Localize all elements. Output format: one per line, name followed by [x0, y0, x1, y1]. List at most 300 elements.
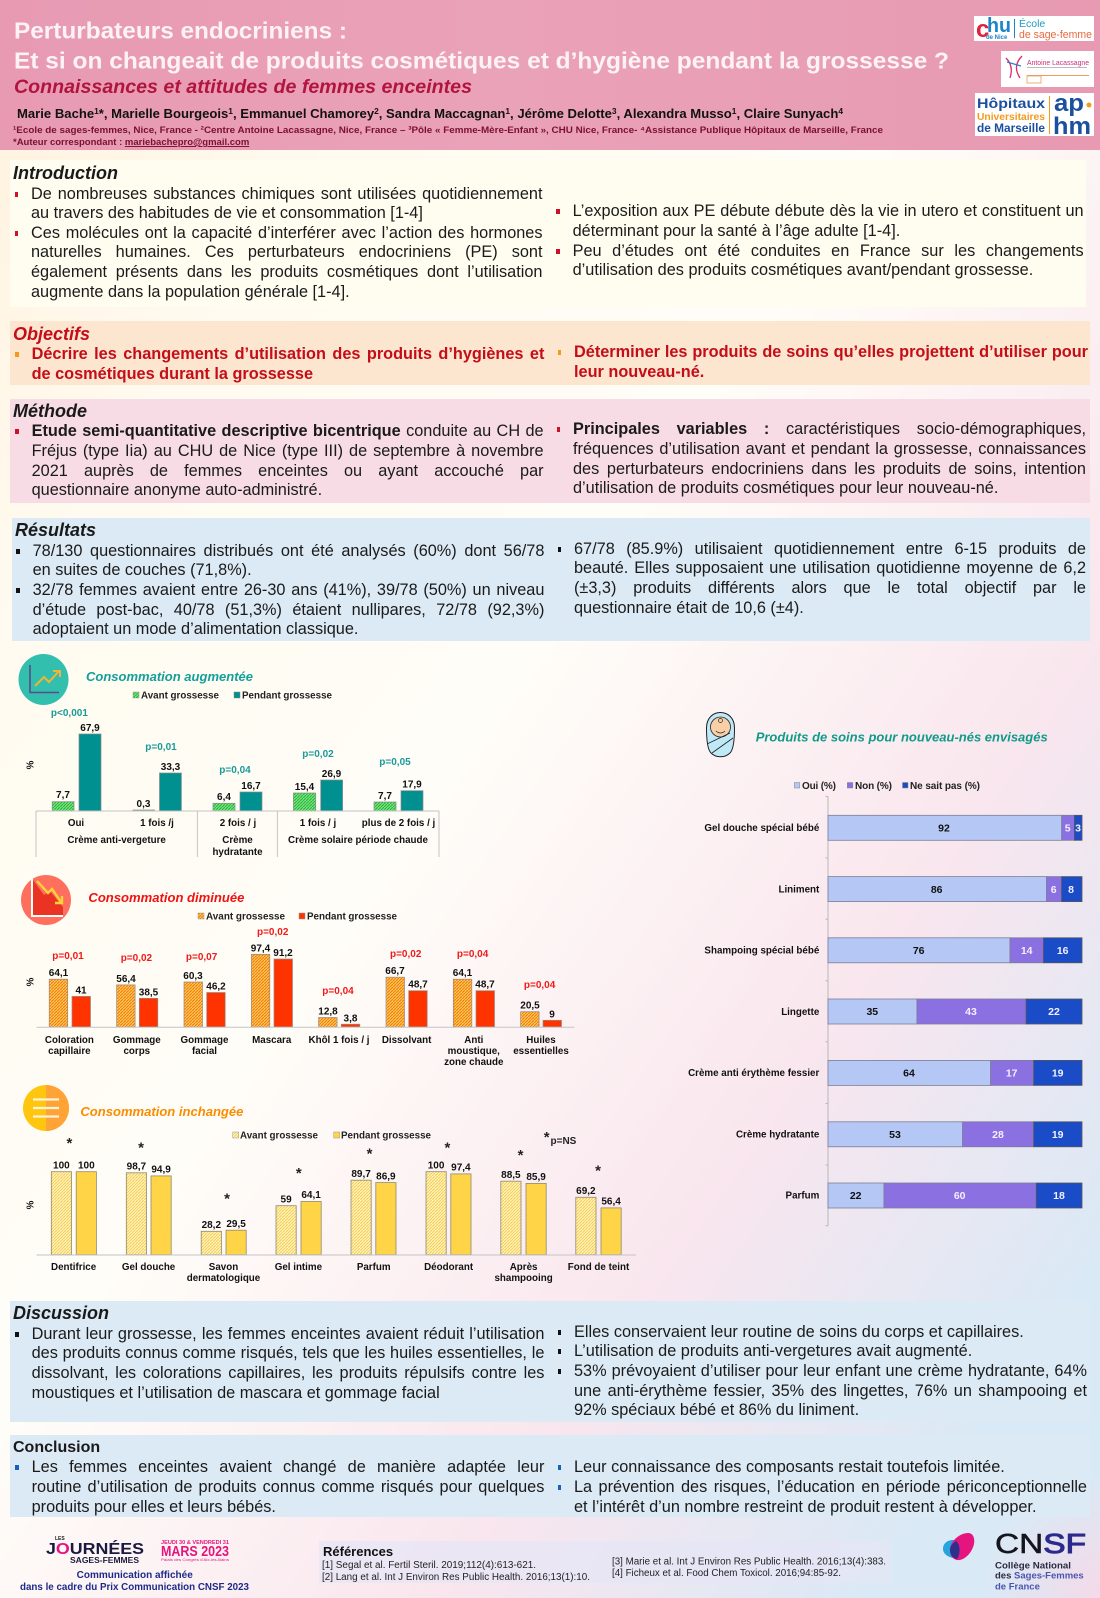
row: gel douche — [704, 815, 1082, 840]
heading: objectifs: Objectifs — [13, 324, 90, 344]
icon: stable lines — [23, 1085, 69, 1131]
logo: CNSF — [943, 1528, 1086, 1592]
value labels: 100 — [78, 1160, 95, 1172]
category labels — [67, 818, 436, 858]
value labels: 26,9 — [322, 769, 342, 780]
authors: , Claire Sunyach — [736, 107, 838, 121]
value labels: 0,3 — [137, 799, 151, 810]
significance stars — [66, 1135, 601, 1207]
row: gel douche: Gel douche spécial bébé — [704, 823, 820, 834]
logo: Journées Sages-Femmes — [46, 1536, 229, 1565]
chart: consommation augmentée — [18, 654, 439, 858]
communication note — [20, 1570, 249, 1593]
category labels: hydratante — [212, 847, 263, 858]
text block: méthode left: 2021 auprès de femmes enceintes ou ayant accouché par — [32, 462, 544, 480]
axis — [36, 811, 439, 857]
authors: 1 — [732, 107, 737, 116]
logo: Journées Sages-Femmes: MARS 2023 — [161, 1543, 229, 1560]
chart: consommation diminuée — [21, 875, 574, 1068]
value labels: 85,9 — [526, 1172, 546, 1183]
text block: discussion right: 92% spéciaux bébé et 86% du liniment. — [574, 1401, 859, 1419]
text block: discussion left: des produits connus comme risqués, tels que les huiles essentielles, le — [32, 1344, 544, 1362]
category labels: Déodorant — [424, 1262, 474, 1273]
legend: Pendant grossesse — [242, 690, 332, 702]
category labels: shampooing — [494, 1273, 553, 1284]
text block: discussion right — [558, 1323, 1087, 1419]
text block: résultats left: 32/78 femmes avaient entre 26-30 ans (41%), 39/78 (50%) un niveau — [33, 581, 544, 599]
text block: conclusion right: La prévention des risques, l’éducation en période périconceptionnelle — [574, 1478, 1087, 1496]
p values: p=0,01 — [52, 951, 84, 962]
category labels — [45, 1035, 569, 1068]
category labels: Gommage — [181, 1035, 229, 1046]
legend: Avant grossesse — [240, 1130, 318, 1142]
category labels: corps — [123, 1046, 151, 1057]
references heading: Références — [323, 1544, 393, 1559]
value labels: 56,4 — [601, 1196, 621, 1208]
chart title: Consommation inchangée — [80, 1104, 243, 1119]
category labels: 2 fois / j — [220, 818, 257, 829]
text block: introduction left: au travers des habitudes de vie et consommation [1-4] — [31, 204, 423, 222]
logo: Antoine Lacassagne — [1001, 51, 1094, 87]
communication note: dans le cadre du Prix Communication CNSF 2023 — [20, 1582, 249, 1593]
text block: résultats right — [558, 540, 1086, 617]
value labels: 98,7 — [127, 1162, 147, 1172]
text block: méthode left: Etude semi-quantitative descriptive bicentrique conduite au CH de — [32, 422, 544, 440]
legend: Avant grossesse — [141, 690, 219, 702]
row: parfum: 22 — [850, 1190, 862, 1202]
text block: objectifs left: Décrire les changements d’utilisation des produits d’hygiènes et — [32, 345, 544, 363]
authors: 1 — [228, 107, 234, 116]
authors: *, Marielle Bourgeois — [99, 107, 228, 121]
logo: CHU Nice: École — [1019, 17, 1045, 30]
logo: CHU Nice: c — [976, 16, 989, 43]
logo: Journées Sages-Femmes: JEUDI 30 & VENDREDI 31 — [161, 1540, 229, 1546]
chart title: Consommation diminuée — [88, 890, 244, 905]
row: crème hydratante: 19 — [1052, 1129, 1064, 1141]
row: lingette — [781, 999, 1082, 1024]
value labels: 28,2 — [202, 1220, 221, 1231]
value labels: 17,9 — [402, 780, 422, 790]
row: crème hydratante: Crème hydratante — [736, 1130, 820, 1140]
row: parfum: 18 — [1053, 1190, 1065, 1202]
value labels: 41 — [75, 986, 87, 996]
text block: objectifs right: Déterminer les produits de soins qu’elles projettent d’utiliser pour — [574, 343, 1088, 361]
value labels: 67,9 — [80, 723, 100, 734]
logo: Antoine Lacassagne: Antoine Lacassagne — [1027, 58, 1089, 67]
heading: discussion: Discussion — [13, 1303, 109, 1323]
p=NS note: * — [544, 1129, 550, 1146]
text block: discussion right: Elles conservaient leur routine de soins du corps et capillaires. — [574, 1323, 1024, 1341]
value labels: 100 — [53, 1160, 70, 1172]
significance stars: * — [66, 1135, 72, 1152]
text block: introduction left: naturelles humaines. Ces perturbateurs endocriniens (PE) sont — [31, 243, 542, 261]
text block: conclusion right: et l’intérêt d’un nombre restreint de produit restent à développer. — [574, 1498, 1036, 1516]
panel: méthode — [10, 399, 1090, 503]
panel: conclusion — [10, 1435, 1090, 1517]
text block: méthode right: d’utilisation de produits cosmétiques pour leur nouveau-né. — [573, 479, 998, 497]
significance stars: * — [138, 1140, 144, 1157]
logo: APHM: ap — [1054, 90, 1084, 117]
legend — [133, 690, 332, 702]
legend: Pendant grossesse — [307, 912, 397, 922]
category labels: Fond de teint — [568, 1262, 630, 1273]
p values: p=0,07 — [186, 952, 218, 963]
reference list — [322, 1556, 886, 1583]
value labels: 48,7 — [475, 980, 495, 990]
significance stars: * — [595, 1162, 601, 1179]
text block: méthode right — [557, 420, 1086, 497]
logo: APHM: Hôpitaux — [977, 95, 1045, 111]
communication note: Communication affichée — [77, 1570, 193, 1581]
row: lingette: 35 — [866, 1006, 878, 1018]
authors: 2 — [374, 107, 379, 116]
y axis unit: % — [26, 977, 36, 986]
authors: , Emmanuel Chamorey — [233, 107, 374, 121]
category labels: essentielles — [513, 1046, 569, 1057]
text block: résultats left: d’étude post-bac, 40/78 (51,3%) étaient nullipares, 72/78 (92,3%) — [33, 601, 544, 619]
logo: CNSF: des Sages-Femmes — [995, 1570, 1084, 1582]
row: crème anti érythème — [688, 1060, 1082, 1085]
title: Et si on changeait de produits cosmétiques et d’hygiène pendant la grossesse ? — [14, 48, 949, 74]
category labels: Huiles — [526, 1035, 556, 1046]
text block: introduction left: également présents dans les produits cosmétiques dont l’utilisation — [31, 263, 542, 281]
authors: Marie Bache — [17, 107, 91, 121]
value labels: 20,5 — [520, 1000, 540, 1012]
authors: 3 — [612, 107, 617, 116]
logo: Journées Sages-Femmes: Palais des Congrès d’Aix-les-Bains — [161, 1557, 229, 1562]
text block: conclusion left: Les femmes enceintes avaient changé de manière adaptée leur — [32, 1458, 544, 1476]
category labels: Coloration — [45, 1035, 94, 1046]
category labels: zone chaude — [444, 1057, 504, 1068]
p values: p=0,04 — [322, 986, 354, 997]
category labels: Savon — [209, 1262, 238, 1273]
value labels: 29,5 — [226, 1219, 246, 1230]
affiliations: ¹Ecole de sages-femmes, Nice, France - ²Centre Antoine Lacassagne, Nice, France – ³Pôle « Femme-Mère-Enfant », CHU Nice, France- ⁴Assistance Publique Hôpitaux de Marseille, France — [13, 125, 883, 136]
baseline — [37, 1026, 575, 1028]
text block: introduction left — [15, 185, 542, 301]
p values: p=0,04 — [219, 765, 251, 776]
category labels: Après — [510, 1262, 538, 1273]
authors: , Alexandra Musso — [617, 107, 732, 121]
value labels: 16,7 — [241, 781, 261, 792]
y axis unit: % — [26, 1200, 36, 1209]
value labels — [56, 723, 422, 810]
text block: objectifs left: de cosmétiques durant la grossesse — [32, 365, 313, 383]
reference list: [4] Ficheux et al. Food Chem Toxicol. 2016;94:85-92. — [612, 1568, 841, 1579]
logo: APHM: hm — [1053, 113, 1091, 140]
authors: , Sandra Maccagnan — [379, 107, 505, 121]
value labels: 66,7 — [385, 966, 405, 977]
legend: Oui (%) — [802, 781, 836, 792]
text block: introduction right: d’utilisation des produits cosmétiques avant/pendant grossesse. — [573, 261, 1033, 279]
bars — [51, 1172, 621, 1255]
row: crème hydratante — [736, 1122, 1082, 1147]
category labels: plus de 2 fois / j — [362, 818, 436, 829]
text block: méthode left: questionnaire anonyme auto-administré. — [32, 481, 322, 499]
value labels: 88,5 — [501, 1170, 521, 1181]
row: parfum: Parfum — [786, 1190, 820, 1202]
text block: conclusion left — [15, 1458, 544, 1516]
category labels: Mascara — [252, 1035, 292, 1046]
row: liniment — [778, 877, 1082, 902]
axis — [826, 796, 828, 1226]
text block: introduction left: Ces molécules ont la capacité d’interférer avec l’action des hormones — [31, 224, 542, 242]
heading: conclusion: Conclusion — [13, 1439, 100, 1456]
icon: falling chart — [21, 875, 71, 925]
category labels: Gel douche — [122, 1262, 176, 1273]
bars — [49, 954, 561, 1027]
p values — [51, 708, 411, 776]
row: parfum — [786, 1183, 1082, 1208]
significance stars: * — [518, 1147, 524, 1164]
authors: , Jérôme Delotte — [510, 107, 612, 121]
logo: CNSF: CN SF — [995, 1528, 1086, 1559]
text block: résultats right: beauté. Elles supposaient une utilisation quotidienne moyenne de 6,2 — [574, 559, 1086, 577]
text block: conclusion right: Leur connaissance des composants restait toutefois limitée. — [574, 1458, 1005, 1476]
text block: introduction right: L’exposition aux PE débute débute dès la vie in utero et constituent un — [573, 202, 1084, 220]
row: crème hydratante: 28 — [992, 1129, 1004, 1141]
value labels: 60,3 — [183, 971, 203, 982]
row: liniment: Liniment — [778, 884, 820, 896]
text block: objectifs right: leur nouveau-né. — [574, 363, 704, 381]
value labels: 9 — [549, 1010, 555, 1020]
p values: p=0,04 — [524, 980, 556, 991]
legend: Pendant grossesse — [341, 1130, 431, 1142]
text block: objectifs left — [15, 345, 544, 383]
logo: Journées Sages-Femmes: JOURNÉES — [46, 1539, 144, 1558]
panel: discussion — [10, 1301, 1090, 1422]
row: lingette: Lingette — [781, 1007, 820, 1018]
p=NS note — [544, 1129, 577, 1147]
panel: objectifs — [10, 321, 1090, 385]
text block: discussion right: une anti-érythème fessier, 35% des lingettes, 76% un shampooing et — [574, 1382, 1087, 1400]
row: shampoing: 14 — [1021, 945, 1033, 957]
value labels: 48,7 — [408, 980, 428, 990]
logo: Journées Sages-Femmes: SAGES-FEMMES — [70, 1556, 140, 1565]
row: parfum: 60 — [954, 1190, 966, 1202]
row: gel douche: 92 — [938, 822, 950, 834]
value labels: 6,4 — [217, 792, 231, 803]
row: crème anti érythème: 19 — [1052, 1068, 1064, 1080]
text block: objectifs right — [558, 343, 1088, 381]
p values: p=0,04 — [457, 949, 489, 960]
text block: introduction left: augmente dans la population générale [1-4]. — [31, 283, 350, 301]
p=NS note: p=NS — [550, 1136, 577, 1147]
category labels: Gel intime — [275, 1262, 323, 1273]
logo: CNSF: Collège National — [995, 1560, 1071, 1572]
value labels: 64,1 — [49, 968, 69, 979]
text block: introduction right: Peu d’études ont été conduites en France sur les changements — [573, 242, 1084, 260]
text block: résultats left: en suites de couches (71,8%). — [33, 561, 252, 579]
category labels: moustique, — [448, 1046, 500, 1057]
row: crème hydratante: 53 — [889, 1129, 901, 1141]
row: shampoing: 76 — [913, 945, 925, 957]
value labels: 94,9 — [151, 1164, 171, 1176]
row: liniment: 86 — [931, 884, 943, 896]
row: lingette: 43 — [965, 1006, 977, 1018]
text block: résultats right: questionnaire était de 10,6 (±4). — [574, 599, 804, 617]
p values: p=0,02 — [257, 927, 289, 938]
category labels: capillaire — [48, 1046, 91, 1057]
text block: résultats left: 78/130 questionnaires distribués ont été analysés (60%) dont 56/78 — [33, 542, 544, 560]
value labels: 33,3 — [161, 762, 181, 773]
text block: méthode right: des perturbateurs endocriniens dans les produits de soins, intention — [573, 460, 1086, 478]
title — [14, 18, 949, 74]
heading: résultats: Résultats — [15, 520, 96, 540]
reference list: [2] Lang et al. Int J Environ Res Public Health. 2016;13(1):10. — [322, 1572, 590, 1583]
chart title: Produits de soins pour nouveau-nés envisagés — [756, 730, 1048, 744]
value labels: 56,4 — [116, 974, 136, 985]
p values: p=0,02 — [121, 953, 153, 964]
row: shampoing — [704, 938, 1082, 963]
value labels — [49, 944, 555, 1024]
category labels: Dentifrice — [51, 1262, 97, 1273]
value labels: 89,7 — [351, 1169, 371, 1180]
significance stars: * — [224, 1190, 230, 1207]
category labels: Crème anti-vergeture — [67, 835, 166, 846]
logo: CHU Nice — [974, 15, 1094, 43]
y axis unit: % — [26, 760, 36, 769]
p values: p=0,05 — [379, 757, 411, 768]
logo: CHU Nice: hu — [987, 15, 1011, 37]
text block: méthode right: fréquences d’utilisation avant et pendant la grossesse, connaissances — [573, 440, 1086, 458]
reference list: [1] Segal et al. Fertil Steril. 2019;112(4):613-621. — [322, 1560, 536, 1571]
text block: résultats right: (±3,3) produits différents alors que le total objectif par le — [574, 579, 1086, 597]
text block: discussion right: 53% prévoyaient d’utiliser pour leur enfant une crème hydratante, 64% — [574, 1362, 1087, 1380]
category labels — [51, 1262, 630, 1284]
icon: swaddled baby — [706, 712, 734, 757]
text block: discussion right: L’utilisation de produits anti-vergetures avait augmenté. — [574, 1342, 972, 1360]
significance stars: * — [367, 1146, 373, 1163]
category labels: 1 fois /j — [140, 818, 174, 829]
legend: Avant grossesse — [206, 912, 285, 922]
row: gel douche: 3 — [1075, 822, 1081, 834]
p values — [52, 927, 556, 997]
panel: résultats — [12, 518, 1090, 641]
reference list: [3] Marie et al. Int J Environ Res Public Health. 2016;13(4):383. — [612, 1556, 886, 1568]
value labels: 3,8 — [344, 1014, 358, 1024]
text block: méthode right: Principales variables : caractéristiques socio-démographiques, — [573, 420, 1086, 438]
value labels: 7,7 — [56, 790, 70, 801]
panel: introduction — [10, 160, 1086, 307]
text block: résultats left: adoptaient un mode d’alimentation classique. — [33, 620, 358, 638]
heading: méthode: Méthode — [13, 401, 87, 421]
category labels: Anti — [464, 1035, 484, 1046]
p values: p=0,01 — [145, 742, 177, 753]
logo: APHM — [975, 90, 1094, 140]
text block: discussion left: dissolvant, les colorations capillaires, les produits répulsifs contre les — [32, 1364, 544, 1382]
text block: méthode left: Fréjus (type Iia) au CHU de Nice (type III) de septembre à novembre — [32, 442, 544, 460]
significance stars: * — [444, 1140, 450, 1157]
category labels: dermatologique — [187, 1273, 261, 1284]
text block: conclusion left: produits pour elles et leurs bébés. — [32, 1498, 276, 1516]
text block: introduction right: déterminant pour la santé à l’âge adulte [1-4]. — [573, 222, 900, 240]
authors: 4 — [838, 107, 844, 116]
subtitle: Connaissances et attitudes de femmes enceintes — [14, 77, 472, 98]
value labels: 86,9 — [376, 1172, 396, 1182]
value labels: 91,2 — [273, 948, 293, 959]
value labels: 7,7 — [378, 791, 392, 802]
row: lingette: 22 — [1048, 1006, 1060, 1018]
text block: discussion left: Durant leur grossesse, les femmes enceintes avaient réduit l’utilisation — [32, 1325, 544, 1343]
icon: rising chart — [18, 654, 68, 705]
value labels: 64,1 — [453, 968, 473, 979]
chart title: Consommation augmentée — [86, 669, 253, 684]
legend — [233, 1130, 431, 1142]
legend: Non (%) — [855, 781, 892, 792]
row: crème anti érythème: Crème anti érythème fessier — [688, 1068, 819, 1079]
category labels: Crème solaire période chaude — [288, 835, 429, 846]
value labels: 69,2 — [576, 1186, 596, 1197]
value labels: 38,5 — [139, 988, 159, 998]
text block: conclusion right — [558, 1458, 1087, 1516]
legend — [198, 912, 397, 922]
value labels — [53, 1160, 621, 1231]
authors: 1 — [505, 107, 511, 116]
references — [319, 1541, 891, 1583]
category labels: Khôl 1 fois / j — [309, 1035, 370, 1046]
text block: résultats right: 67/78 (85.9%) utilisaient quotidiennement entre 6-15 produits de — [574, 540, 1086, 558]
category labels: Gommage — [113, 1035, 161, 1046]
text block: discussion left: moustiques et l’utilisation de mascara et gommage facial — [32, 1384, 440, 1402]
baseline — [37, 1254, 636, 1256]
value labels: 100 — [428, 1160, 445, 1172]
row: liniment: 8 — [1068, 884, 1074, 896]
category labels: facial — [192, 1046, 217, 1057]
text block: introduction right — [556, 202, 1084, 279]
value labels: 15,4 — [295, 782, 315, 793]
row: gel douche: 5 — [1065, 822, 1071, 834]
chart: produits de soins pour nouveau-nés — [688, 712, 1082, 1226]
row: liniment: 6 — [1051, 884, 1057, 896]
logo: Journées Sages-Femmes: LES — [55, 1536, 65, 1542]
value labels: 12,8 — [318, 1006, 338, 1018]
chart: consommation inchangée — [23, 1085, 636, 1284]
row: crème anti érythème: 17 — [1006, 1068, 1018, 1080]
row: crème anti érythème: 64 — [903, 1068, 915, 1080]
text block: discussion left — [15, 1325, 544, 1402]
corresponding author: *Auteur correspondant : mariebachepro@gmail.com — [13, 137, 249, 148]
header banner — [0, 0, 1100, 150]
authors: 1 — [94, 107, 99, 116]
logo: APHM: de Marseille — [977, 121, 1045, 135]
category labels: Crème — [222, 835, 253, 846]
logo: CHU Nice: de sage-femme — [1019, 29, 1092, 41]
value labels: 46,2 — [206, 982, 226, 992]
value labels: 97,4 — [451, 1162, 471, 1174]
legend: Ne sait pas (%) — [910, 781, 980, 792]
significance stars: * — [296, 1165, 302, 1182]
text block: résultats left — [16, 542, 544, 638]
category labels: Parfum — [357, 1262, 391, 1273]
text block: conclusion left: routine d’utilisation de produits connus comme risqués pour quelques — [32, 1478, 544, 1496]
logo: CNSF: de France — [995, 1582, 1040, 1592]
logo: APHM: Universitaires — [977, 112, 1045, 123]
heading: introduction: Introduction — [13, 163, 118, 183]
p values: p=0,02 — [390, 949, 422, 960]
text block: méthode left — [15, 422, 544, 499]
category labels: Dissolvant — [382, 1035, 432, 1046]
title: Perturbateurs endocriniens : — [14, 18, 347, 44]
value labels: 64,1 — [301, 1190, 321, 1201]
category labels: Oui — [68, 818, 84, 829]
value labels: 97,4 — [251, 944, 271, 954]
logo: CHU Nice: de Nice — [986, 35, 1008, 41]
legend — [794, 781, 980, 792]
value labels: 59 — [281, 1194, 292, 1206]
category labels: 1 fois / j — [300, 818, 337, 829]
bars — [52, 734, 423, 811]
